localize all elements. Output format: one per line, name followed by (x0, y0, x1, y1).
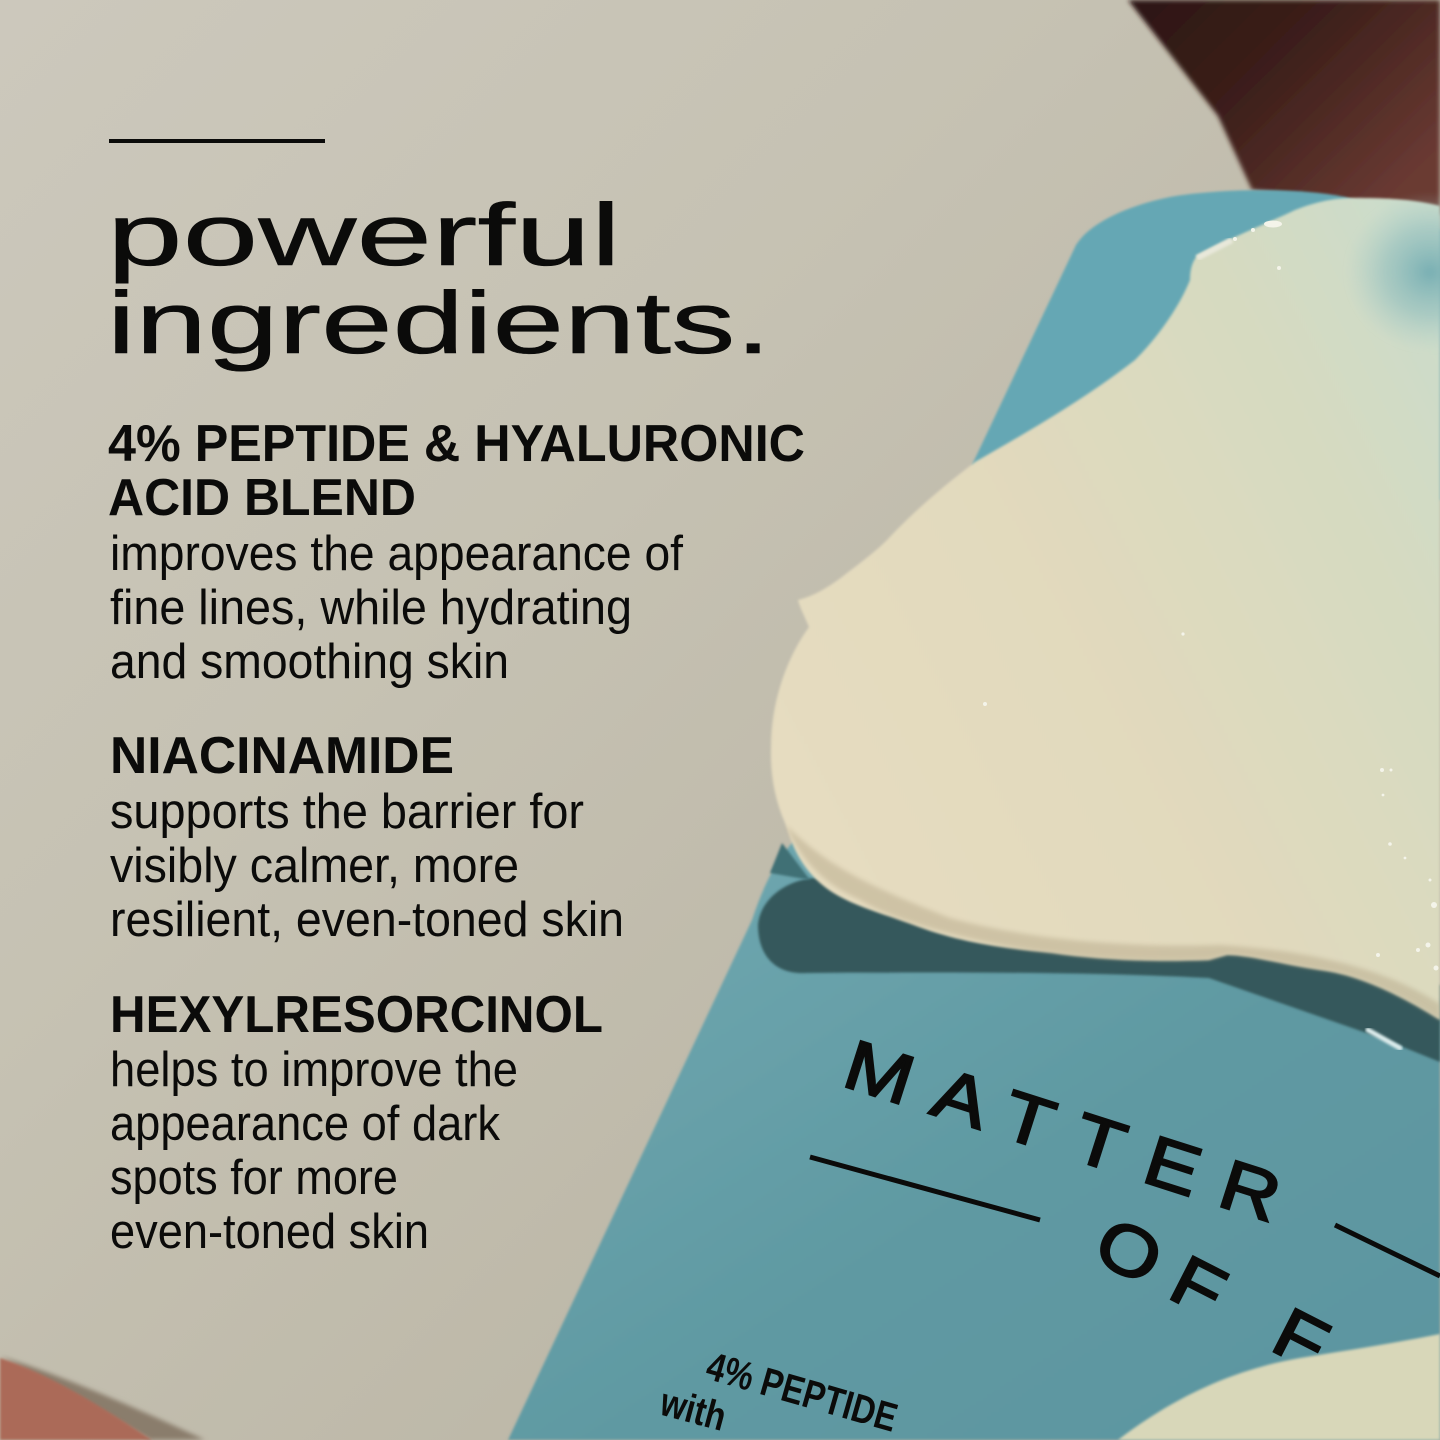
ingredient description: appearance of dark (110, 1097, 500, 1151)
ingredient description: supports the barrier for (110, 785, 584, 839)
jar brand text (655, 1025, 1440, 1440)
upper bottle (972, 190, 1440, 500)
cream swatch (771, 192, 1440, 1020)
ingredient heading: NIACINAMIDE (110, 727, 454, 785)
ingredient description (110, 1043, 518, 1259)
hand top right (1128, 0, 1440, 215)
cream shape (771, 198, 1440, 1020)
brand lines (810, 1157, 1440, 1276)
ingredient description: even-toned skin (110, 1205, 429, 1259)
jar corner shade (770, 843, 810, 880)
lower jar (508, 840, 1440, 1440)
brand word: MATTER (835, 1025, 1290, 1237)
cream bottom right (1118, 1334, 1440, 1440)
cream tint (1345, 192, 1440, 352)
ingredient description (110, 785, 624, 947)
jar glint (1368, 1030, 1400, 1048)
title: ingredients. (107, 273, 771, 372)
finger shadow (0, 1356, 205, 1440)
ingredient description: fine lines, while hydrating (110, 581, 632, 635)
rule (109, 139, 325, 143)
ingredient heading (108, 415, 805, 527)
ingredient description: resilient, even-toned skin (110, 893, 624, 947)
title (107, 185, 771, 372)
ingredient heading: 4% PEPTIDE & HYALURONIC (108, 415, 805, 473)
ingredient description: spots for more (110, 1151, 398, 1205)
cream highlights (983, 220, 1438, 970)
ingredient heading: ACID BLEND (108, 469, 416, 527)
ingredient heading: HEXYLRESORCINOL (110, 986, 603, 1044)
jar shadow (758, 878, 1440, 1062)
cream lower shade (786, 825, 1440, 1020)
title: powerful (107, 185, 621, 284)
jar body (508, 840, 1440, 1440)
ingredient description: improves the appearance of (110, 527, 683, 581)
ingredient description: and smoothing skin (110, 635, 509, 689)
ingredient description (110, 527, 683, 689)
ingredient: hexylresorcinol (110, 986, 603, 1259)
brand word second line: OF F (1083, 1202, 1341, 1385)
ingredient: niacinamide (110, 727, 624, 947)
finger bottom left (0, 1356, 205, 1440)
ingredient description: helps to improve the (110, 1043, 518, 1097)
ingredient: peptide blend (108, 415, 805, 689)
finger skin (0, 1358, 152, 1440)
ingredient description: visibly calmer, more (110, 839, 519, 893)
